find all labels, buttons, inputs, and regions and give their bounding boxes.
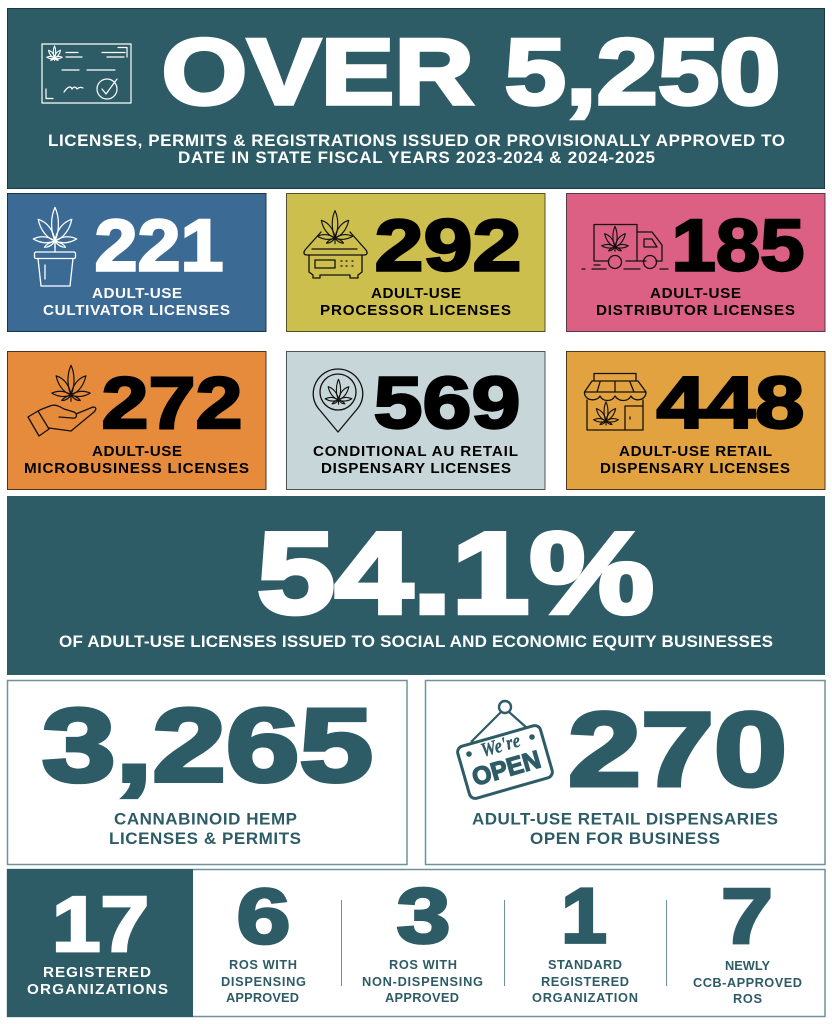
- icon: we're open sign: [456, 701, 554, 800]
- label: ADULT-USE: [371, 285, 461, 302]
- panel: registered organizations: [7, 869, 825, 1017]
- label: ADULT-USE: [92, 443, 182, 460]
- stat: ROs with non-dispensing: ROS WITH: [389, 957, 457, 972]
- icon: potted plant: [33, 207, 77, 286]
- label: DISPENSARY LICENSES: [321, 460, 511, 477]
- panel: equity share: [7, 496, 825, 675]
- stat: ROs with dispensing: [221, 872, 306, 1005]
- label: PROCESSOR LICENSES: [320, 302, 511, 319]
- panel: processor licenses: [286, 194, 545, 332]
- label: [43, 285, 230, 319]
- label: CANNABINOID HEMP: [114, 810, 297, 828]
- label: [600, 443, 790, 477]
- summary block: ORGANIZATIONS: [27, 981, 168, 998]
- panel: headline total: [8, 8, 824, 188]
- stat: newly approved ROs: [693, 872, 802, 1006]
- value: 448: [656, 363, 804, 444]
- caption: OF ADULT-USE LICENSES ISSUED TO SOCIAL AND ECONOMIC EQUITY BUSINESSES: [59, 632, 773, 651]
- stat: ROs with non-dispensing: [362, 872, 483, 1005]
- value: 3,265: [42, 688, 373, 804]
- panel: conditional retail licenses: [286, 352, 545, 490]
- label: [472, 810, 778, 848]
- icon: delivery truck: [582, 224, 668, 269]
- stat: standard RO: 1: [561, 872, 607, 960]
- value: 54.1%: [257, 508, 654, 638]
- stat: newly approved ROs: NEWLY: [725, 958, 770, 973]
- value: 292: [374, 206, 522, 286]
- stat: ROs with non-dispensing: APPROVED: [385, 990, 459, 1005]
- headline number: OVER 5,250: [162, 19, 781, 124]
- panel: microbusiness licenses: [8, 352, 266, 490]
- headline caption: LICENSES, PERMITS & REGISTRATIONS ISSUED OR PROVISIONALLY APPROVED TO: [48, 131, 785, 150]
- stat: ROs with dispensing: APPROVED: [226, 990, 299, 1005]
- icon: weighing scale: [304, 211, 367, 278]
- panel: cultivator licenses: [8, 194, 266, 332]
- label: [596, 285, 795, 319]
- panel: retail dispensary licenses: [566, 352, 825, 490]
- panel: distributor licenses: [566, 194, 825, 332]
- label: [109, 810, 301, 848]
- icon: hand holding leaf: [28, 365, 96, 436]
- label: CONDITIONAL AU RETAIL: [313, 443, 518, 460]
- stat: ROs with dispensing: ROS WITH: [229, 957, 297, 972]
- label: ADULT-USE: [92, 285, 182, 302]
- stat: newly approved ROs: ROS: [733, 991, 762, 1006]
- label: ADULT-USE: [650, 285, 741, 302]
- stat: ROs with non-dispensing: 3: [396, 872, 450, 960]
- label: DISTRIBUTOR LICENSES: [596, 302, 795, 319]
- label: [320, 285, 511, 319]
- icon: we're open sign: OPEN: [469, 746, 544, 792]
- summary block: 17: [52, 880, 149, 968]
- label: OPEN FOR BUSINESS: [530, 829, 720, 848]
- value: 272: [102, 363, 242, 444]
- headline caption: DATE IN STATE FISCAL YEARS 2023-2024 & 2024-2025: [178, 148, 655, 167]
- stat: standard RO: [532, 872, 638, 1005]
- stat: ROs with dispensing: DISPENSING: [221, 974, 306, 989]
- stat: standard RO: REGISTERED: [541, 974, 629, 989]
- stat: ROs with non-dispensing: NON-DISPENSING: [362, 974, 483, 989]
- icon: license certificate: [42, 44, 131, 103]
- value: 270: [568, 692, 787, 808]
- summary block: REGISTERED: [43, 964, 151, 981]
- icon: we're open sign: We're: [478, 730, 523, 762]
- value: 221: [94, 206, 224, 286]
- stat: newly approved ROs: 7: [721, 872, 773, 960]
- stat: standard RO: ORGANIZATION: [532, 990, 638, 1005]
- stat: ROs with dispensing: 6: [236, 872, 290, 960]
- summary block: [7, 869, 193, 1017]
- headline caption: [48, 131, 785, 167]
- panel: hemp licenses: [8, 680, 407, 864]
- label: [313, 443, 518, 477]
- label: DISPENSARY LICENSES: [600, 460, 790, 477]
- value: 569: [374, 363, 520, 444]
- icon: map pin with leaf: [313, 369, 363, 432]
- label: CULTIVATOR LICENSES: [43, 302, 230, 319]
- label: ADULT-USE RETAIL: [619, 443, 772, 460]
- stat: standard RO: STANDARD: [548, 957, 622, 972]
- label: ADULT-USE RETAIL DISPENSARIES: [472, 810, 778, 828]
- panel: open dispensaries: [426, 680, 825, 864]
- icon: storefront: [584, 374, 646, 430]
- label: [24, 443, 249, 477]
- label: LICENSES & PERMITS: [109, 829, 301, 848]
- stat: newly approved ROs: CCB-APPROVED: [693, 975, 802, 990]
- value: 185: [672, 206, 804, 286]
- label: MICROBUSINESS LICENSES: [24, 460, 249, 477]
